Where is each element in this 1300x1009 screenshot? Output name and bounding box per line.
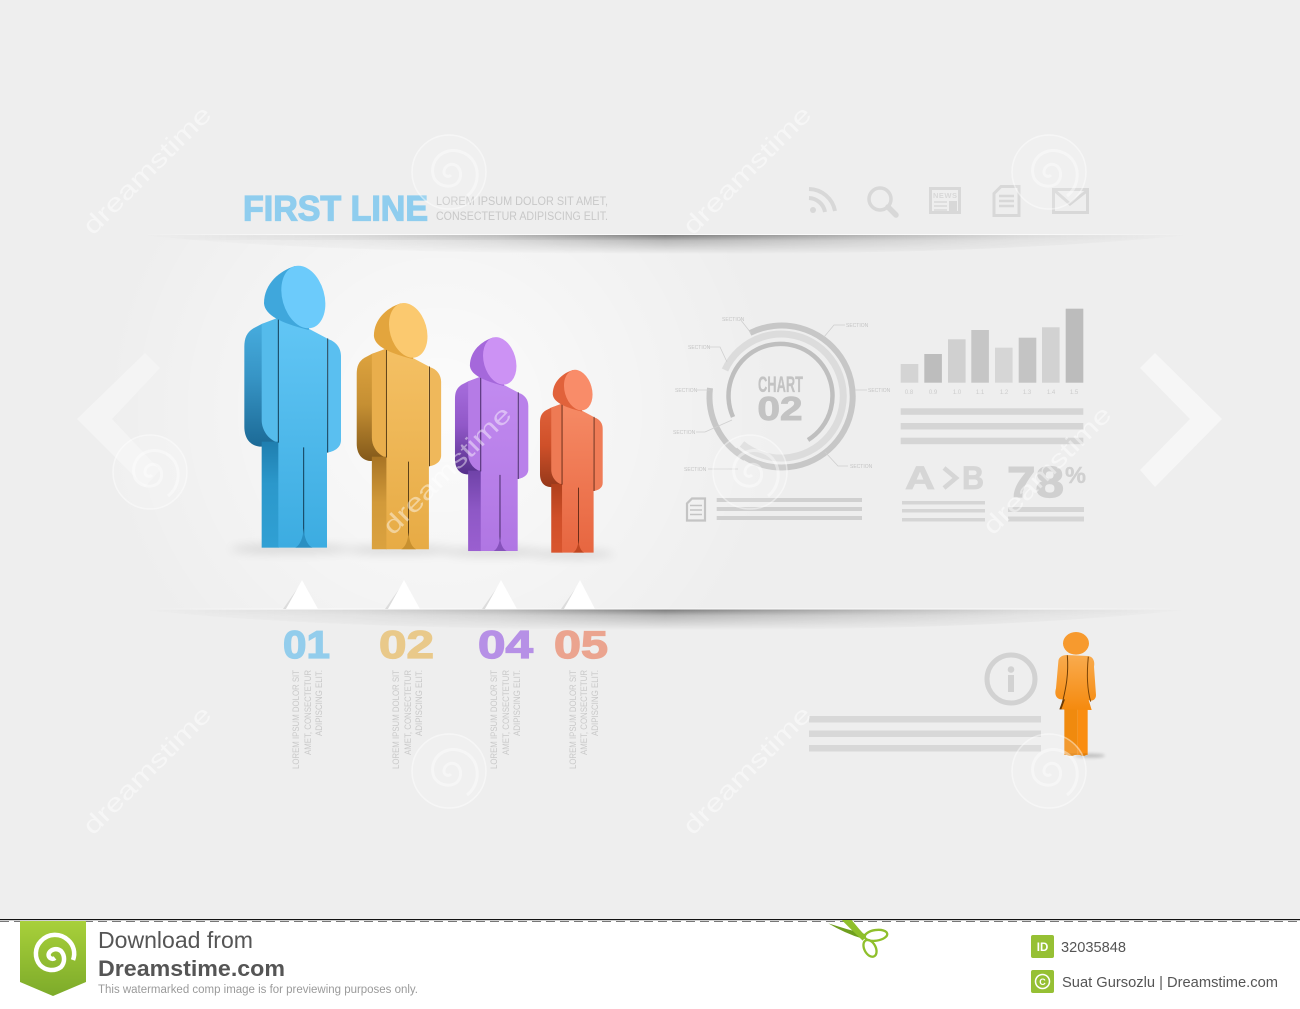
comparison label A > B: B: [962, 460, 984, 496]
figure: orange person: [357, 298, 441, 549]
figure: blue person: [244, 260, 341, 548]
bar chart axis labels: 0.9: [929, 390, 938, 396]
upper shelf divider: [232, 234, 1116, 252]
watermark spirals: [113, 135, 1086, 808]
chart text placeholder lines: [901, 408, 1083, 444]
ring chart: [673, 317, 891, 473]
vertical step captions: AMET, CONSECTETUR: [303, 670, 313, 755]
ring chart section labels: SECTION: [688, 345, 711, 351]
bar chart axis labels: 1.5: [1070, 390, 1079, 396]
placeholder lines under ring chart: [717, 498, 862, 520]
comparison label A > B: A: [905, 460, 935, 496]
vertical step captions: LOREM IPSUM DOLOR SIT: [489, 670, 499, 769]
vertical step captions: ADIPISCING ELIT.: [590, 670, 600, 736]
statistic 78 percent: [1007, 458, 1086, 507]
bar chart axis labels: 1.3: [1023, 390, 1032, 396]
navigation arrow: next: [1140, 353, 1222, 487]
icon: rss: [809, 189, 835, 213]
icon: news: NEWS: [933, 191, 957, 200]
ring chart section labels: SECTION: [673, 430, 696, 436]
vertical step captions: AMET, CONSECTETUR: [579, 670, 589, 755]
step numbers: [283, 624, 608, 667]
ID badge: [1031, 935, 1054, 958]
icon: news: [930, 188, 960, 212]
pointer triangles: [283, 580, 595, 609]
vertical step captions: AMET, CONSECTETUR: [501, 670, 511, 755]
watermark text: [77, 100, 1117, 840]
step numbers: 04: [478, 624, 533, 667]
footer badge: [20, 921, 86, 996]
footer heading: [98, 927, 285, 981]
vertical step captions: ADIPISCING ELIT.: [414, 670, 424, 736]
vertical step captions: LOREM IPSUM DOLOR SIT: [568, 670, 578, 769]
bar chart axis labels: 1.2: [1000, 390, 1009, 396]
copyright badge: C: [1039, 977, 1046, 987]
watermark text: dreamstime: [677, 100, 817, 240]
watermark text: dreamstime: [677, 700, 817, 840]
image id: 32035848: [1061, 940, 1126, 956]
vertical step captions: LOREM IPSUM DOLOR SIT: [291, 670, 301, 769]
statistic 78 percent: %: [1065, 462, 1086, 488]
info placeholder lines: [809, 716, 1041, 752]
footer heading: Download from: [98, 927, 253, 953]
bar chart: [901, 309, 1083, 396]
icon: info: [987, 655, 1035, 703]
bar chart axis labels: 1.0: [953, 390, 962, 396]
copyright badge: [1031, 970, 1054, 993]
placeholder lines under statistic: [1008, 507, 1084, 522]
figure: small orange woman: [1055, 632, 1105, 758]
lower shelf divider: [226, 608, 1122, 628]
ring arcs: [709, 326, 853, 468]
icon: scissors: [828, 920, 888, 959]
header subtitle: LOREM IPSUM DOLOR SIT AMET,: [436, 194, 608, 208]
header title: FIRST LINE: [243, 188, 428, 228]
vertical step captions: [291, 670, 600, 769]
watermark text: dreamstime: [77, 700, 217, 840]
step numbers: 02: [379, 624, 434, 667]
icon: document: [994, 186, 1019, 216]
step numbers: 05: [554, 624, 608, 667]
vertical step captions: LOREM IPSUM DOLOR SIT: [391, 670, 401, 769]
ring chart title: CHART: [758, 372, 803, 397]
watermarks: [77, 100, 1117, 840]
figure: red person: [540, 366, 603, 553]
ring chart title: 02: [758, 390, 802, 427]
ring chart section labels: [673, 317, 891, 473]
navigation arrow: previous: [77, 353, 160, 487]
ring chart section labels: SECTION: [868, 388, 891, 394]
ring chart section labels: SECTION: [684, 467, 707, 473]
ring chart section labels: SECTION: [846, 323, 869, 329]
ring chart section labels: SECTION: [675, 388, 698, 394]
vertical step captions: ADIPISCING ELIT.: [314, 670, 324, 736]
bar chart axis labels: 0.8: [905, 390, 914, 396]
icon: mail: [1054, 190, 1088, 212]
footer heading: Dreamstime.com: [98, 956, 285, 981]
author credit: Suat Gursozlu | Dreamstime.com: [1062, 975, 1278, 991]
placeholder lines under A > B: [902, 501, 985, 522]
watermark text: dreamstime: [77, 100, 217, 240]
figure: purple person: [455, 333, 528, 551]
people pictogram chart: [230, 260, 614, 558]
header icons: [809, 186, 1088, 216]
step numbers: 01: [283, 624, 330, 667]
footer disclaimer: This watermarked comp image is for previewing purposes only.: [98, 984, 418, 996]
vertical step captions: AMET, CONSECTETUR: [403, 670, 413, 755]
ID badge: ID: [1037, 942, 1048, 954]
icon: search: [869, 188, 896, 215]
icon: document under ring chart: [687, 498, 705, 520]
header subtitle: [436, 194, 608, 223]
comparison label A > B: [905, 460, 984, 496]
bar chart axis labels: [905, 390, 1079, 396]
bar chart axis labels: 1.1: [976, 390, 985, 396]
ground shadows: [230, 545, 614, 558]
watermark text: dreamstime: [977, 400, 1117, 540]
ring chart section labels: SECTION: [850, 464, 873, 470]
header subtitle: CONSECTETUR ADIPISCING ELIT.: [436, 209, 608, 223]
statistic 78 percent: 78: [1007, 458, 1064, 507]
footer strip: [0, 919, 1300, 1009]
ring chart section labels: SECTION: [722, 317, 745, 323]
vertical step captions: ADIPISCING ELIT.: [512, 670, 522, 736]
bar chart axis labels: 1.4: [1047, 390, 1056, 396]
ring chart title: [758, 372, 803, 427]
watermark text: dreamstime: [377, 400, 517, 540]
